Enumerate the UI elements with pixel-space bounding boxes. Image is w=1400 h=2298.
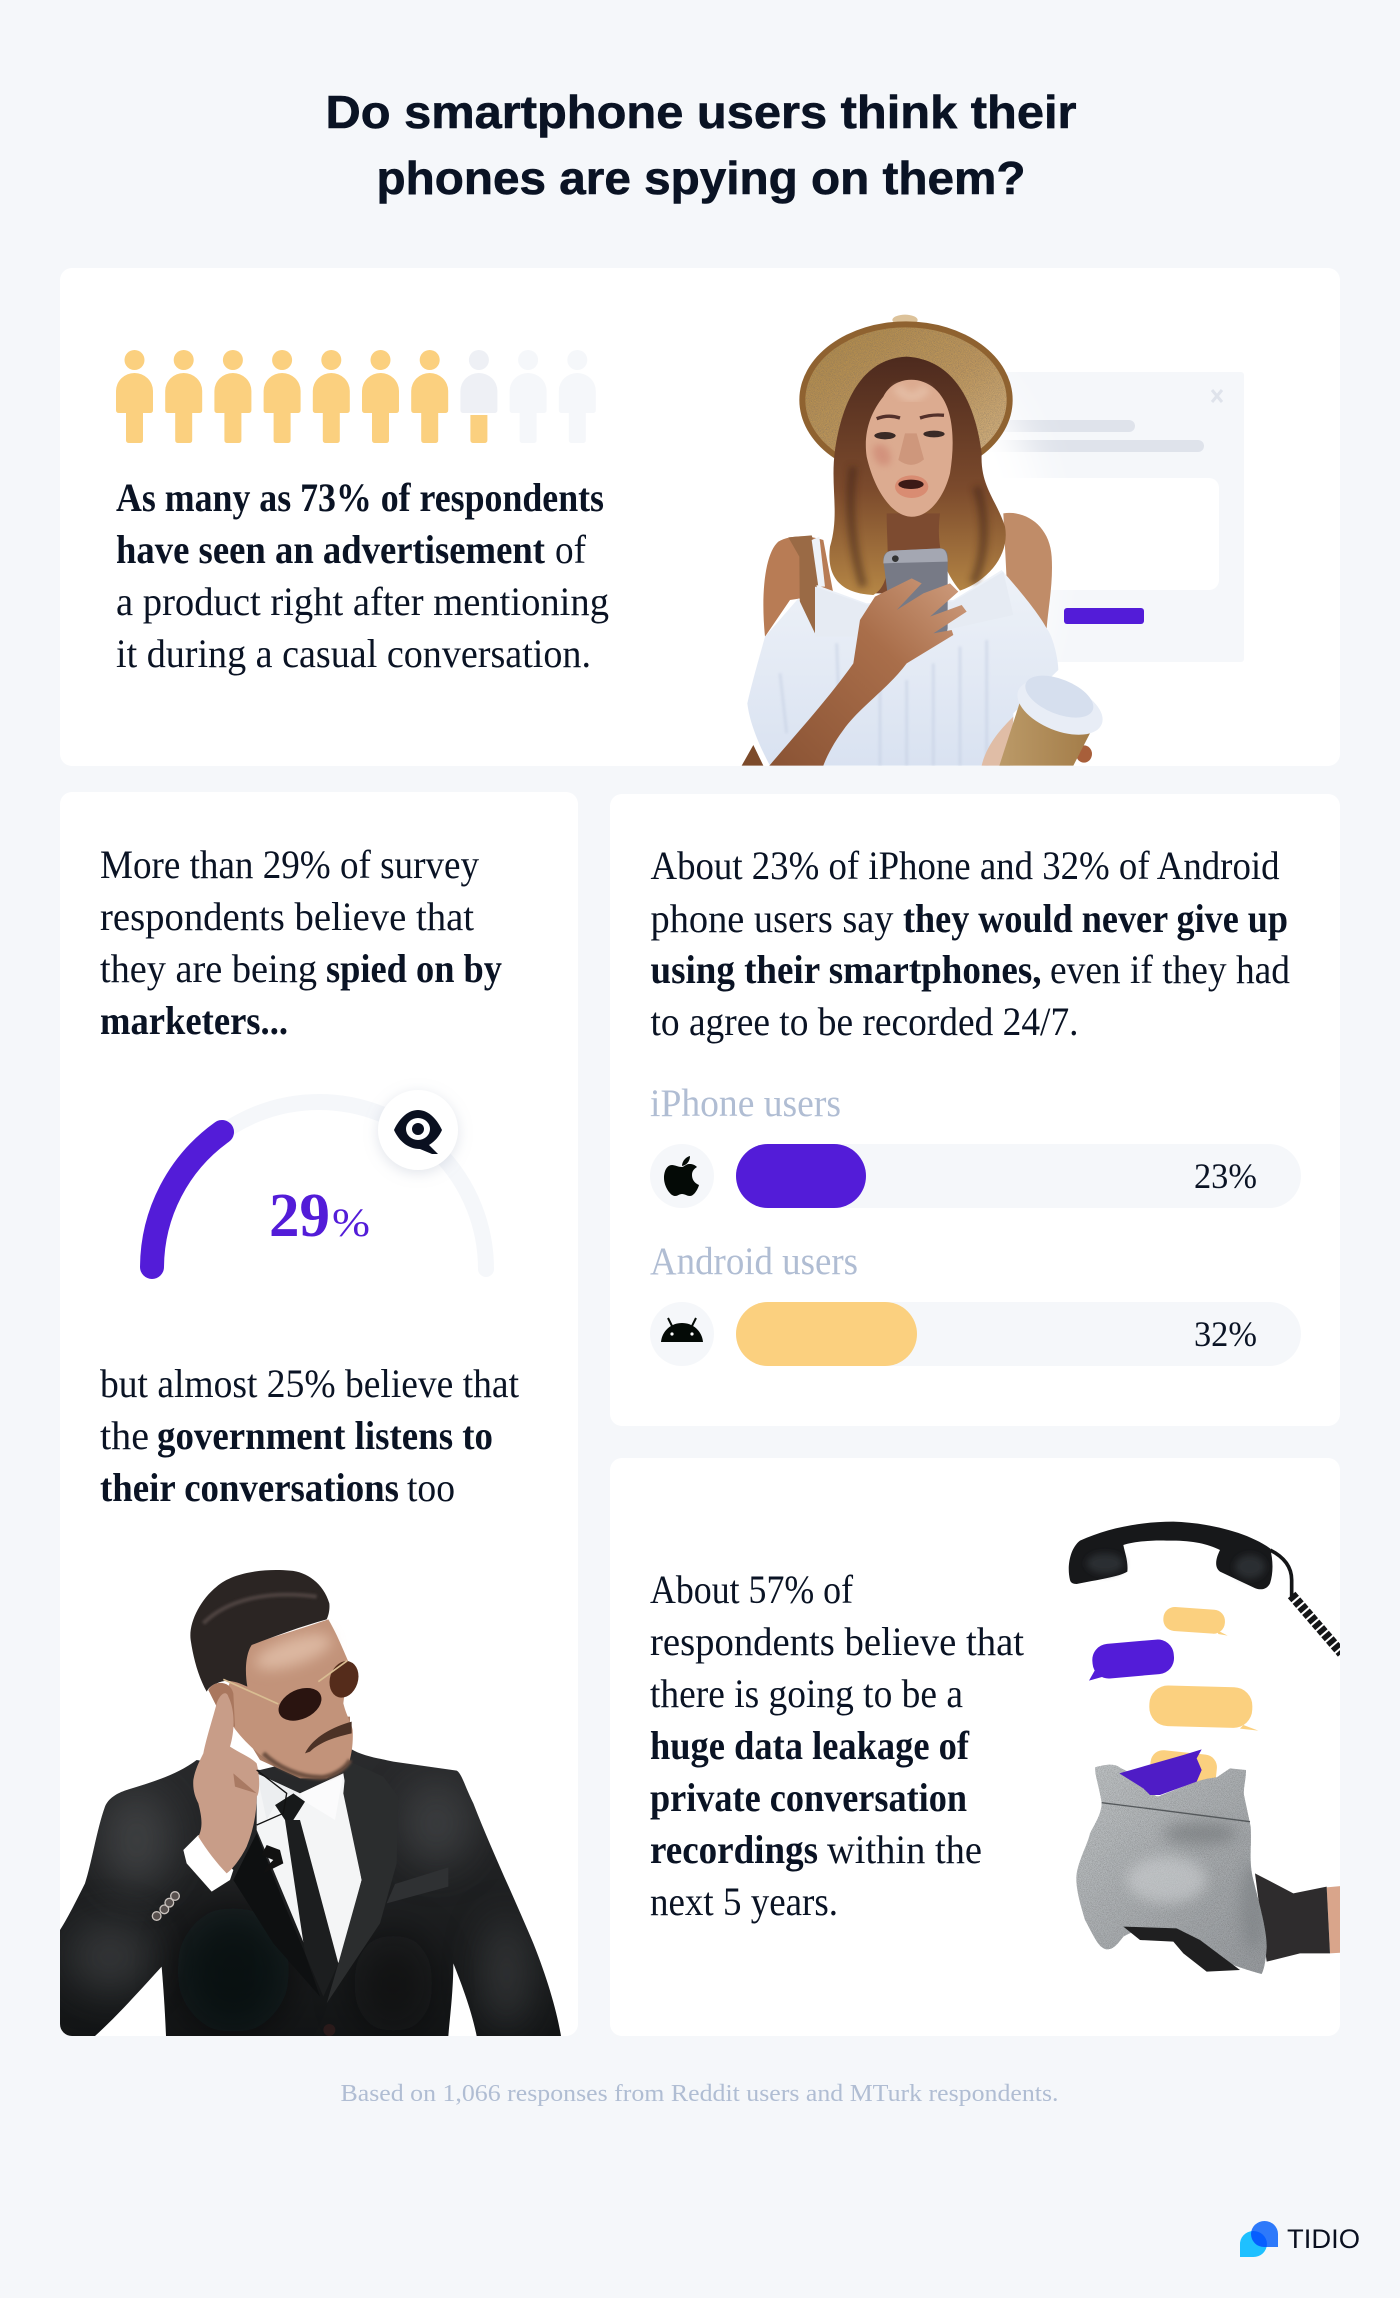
panel: 73% advertisement (60, 268, 1340, 770)
title: phones are spying on them? (376, 152, 1026, 204)
icon: android (650, 1302, 714, 1366)
text: government statement: but almost 25% believe that (100, 1361, 519, 1406)
panel: spied on by marketers (60, 792, 578, 2036)
text: government statement: government listens to (157, 1413, 493, 1458)
text: 57% statement: About 57% of (650, 1567, 854, 1612)
text: 29% statement: marketers... (100, 998, 288, 1043)
text: 57% statement: respondents believe that (650, 1619, 1024, 1664)
title: Do smartphone users think their (326, 86, 1077, 138)
text: iPhone and Android statement (650, 843, 1290, 1044)
text: 57% statement: private conversation (650, 1775, 967, 1820)
text: 29% statement (100, 842, 502, 1043)
text: 29% statement: spied on by (326, 946, 502, 991)
bar chart: iPhone users 23%: 23% (1194, 1156, 1257, 1196)
gauge value: % (332, 1200, 370, 1245)
text: 73% statement: a product right after mentioning (116, 579, 609, 624)
text: iPhone and Android statement: About 23% of iPhone and 32% of Android (650, 843, 1280, 888)
text: government statement (100, 1361, 519, 1510)
gauge value (269, 1182, 370, 1250)
text: iPhone and Android statement: they would never give up (903, 896, 1288, 941)
bar chart: Android users 32%: Android users (650, 1240, 858, 1283)
text: government statement: too (407, 1465, 455, 1510)
bar chart: Android users 32% (650, 1240, 1301, 1366)
bar chart: iPhone users 23%: iPhone users (650, 1082, 841, 1125)
text: government statement: their conversations (100, 1465, 399, 1510)
text: 73% statement: have seen an advertisement (116, 527, 546, 572)
text: iPhone and Android statement: phone users say (650, 896, 894, 941)
icon: listening eye bubble (378, 1090, 458, 1170)
text: 73% statement: of (555, 527, 587, 572)
text: 29% statement: they are being (100, 946, 317, 991)
pictogram: 10 people, 73% filled (116, 350, 596, 443)
bar chart: Android users 32%: 32% (1194, 1314, 1257, 1354)
text: 57% statement: recordings (650, 1827, 818, 1872)
text: 73% statement: it during a casual conversation. (116, 631, 591, 676)
gauge value: 29 (269, 1182, 330, 1250)
text: 73% statement (116, 475, 609, 676)
bar chart: iPhone users 23% (650, 1082, 1301, 1208)
text: 57% statement: next 5 years. (650, 1879, 838, 1924)
sack with gloved hand (1076, 1749, 1342, 1974)
chat bubbles (1089, 1606, 1258, 1789)
icon: apple (650, 1144, 714, 1208)
text: 57% statement: within the (827, 1827, 982, 1872)
text: iPhone and Android statement: even if they had (1050, 947, 1290, 992)
text: 29% statement: respondents believe that (100, 894, 474, 939)
text: iPhone and Android statement: using their smartphones, (650, 947, 1042, 992)
text: government statement: the (100, 1413, 149, 1458)
text: 29% statement: More than 29% of survey (100, 842, 479, 887)
text: 57% statement: there is going to be a (650, 1671, 963, 1716)
panel: would never give up smartphones (610, 794, 1340, 1426)
gauge chart: 29% (152, 1090, 486, 1269)
text: 57% statement: huge data leakage of (650, 1723, 970, 1768)
photo: surprised woman with phone (742, 315, 1110, 766)
text: 57% statement (650, 1567, 1024, 1924)
photo: man in suit with earpiece (60, 1570, 561, 2036)
illustration: handset, chat bubbles and sack (1069, 1522, 1342, 1974)
footnote: Based on 1,066 responses from Reddit users and MTurk respondents. (340, 2081, 1058, 2107)
title (326, 86, 1077, 204)
text: 73% statement: As many as 73% of respondents (116, 475, 604, 520)
icon: telephone handset (1069, 1522, 1342, 1653)
text: iPhone and Android statement: to agree to be recorded 24/7. (650, 999, 1078, 1044)
logo: Tidio: TIDIO (1287, 2224, 1360, 2254)
panel: data leakage (610, 1458, 1342, 2036)
logo: Tidio (1240, 2221, 1360, 2257)
illustration: ad popup window (1004, 372, 1244, 662)
